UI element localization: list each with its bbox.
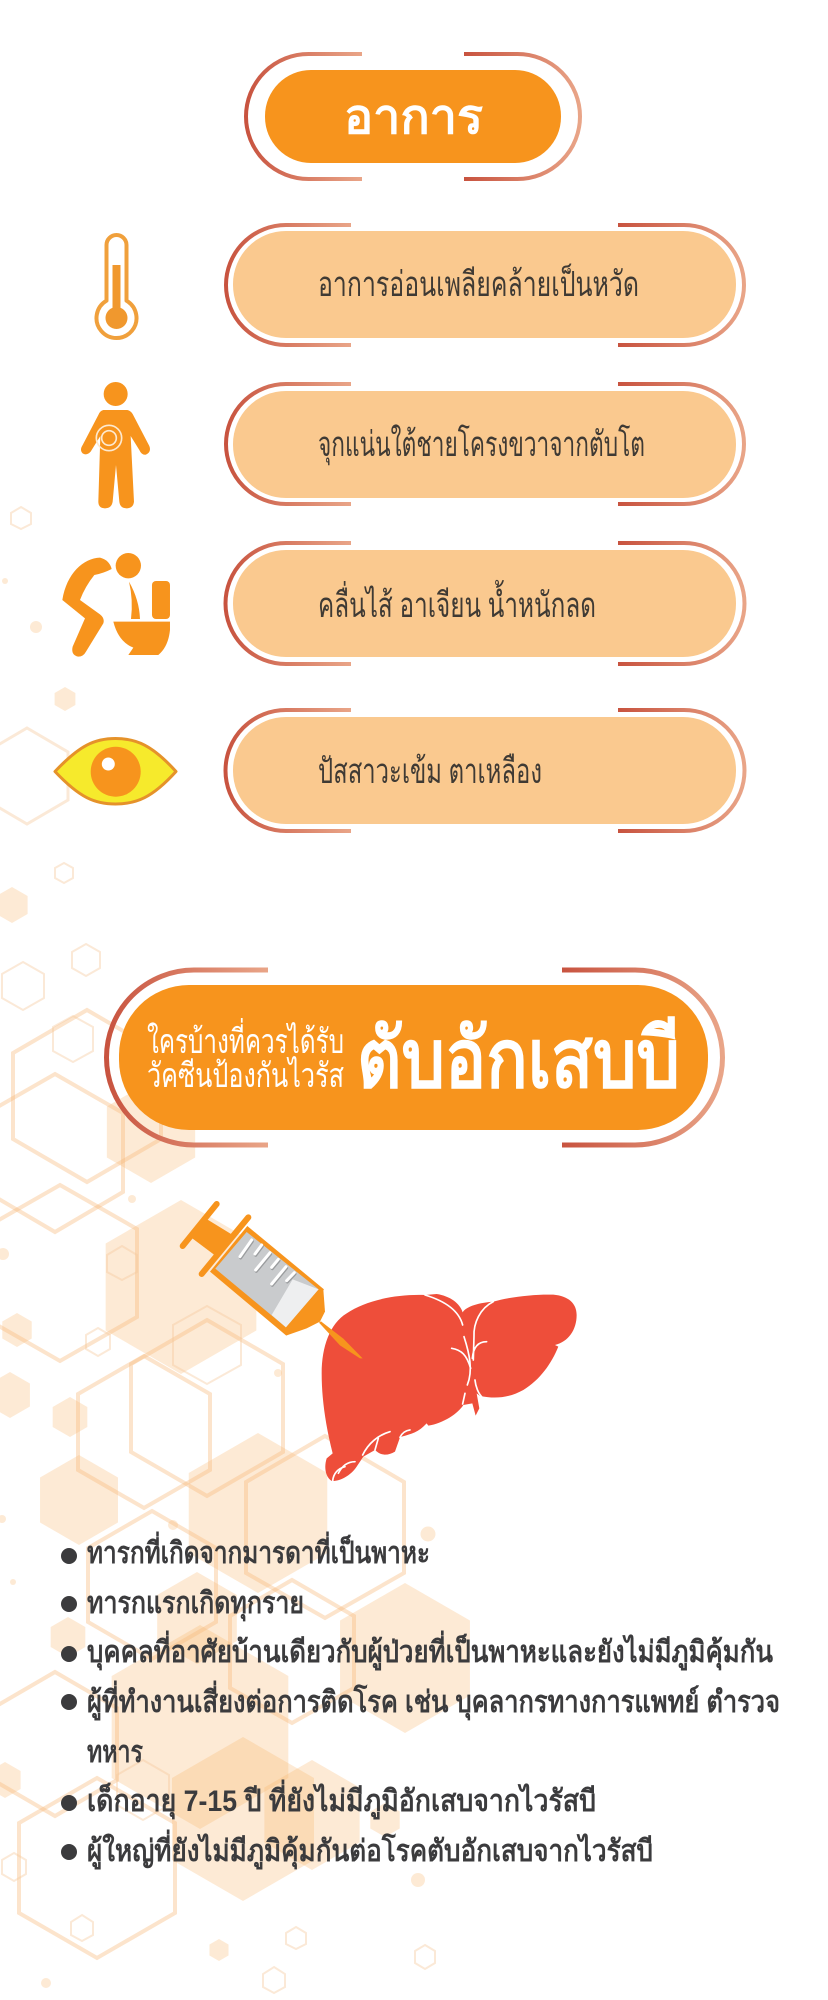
heading: who should get the vaccine: วัคซีนป้องกันไวรัส xyxy=(147,1056,344,1095)
heading: who should get the vaccine: ใครบ้างที่ควรได้รับ xyxy=(147,1018,344,1061)
heading: symptoms: อาการ xyxy=(344,91,483,144)
bullet list: at-risk groups: ทารกที่เกิดจากมารดาที่เป็นพาหะ xyxy=(87,1531,430,1570)
icon: thermometer xyxy=(97,235,136,338)
bullet list: at-risk groups: ทหาร xyxy=(87,1736,143,1769)
bullet list: at-risk groups: ผู้ใหญ่ที่ยังไม่มีภูมิคุ้มกันต่อโรคตับอักเสบจากไวรัสบี xyxy=(87,1829,653,1870)
card: weakness: อาการอ่อนเพลียคล้ายเป็นหวัด xyxy=(318,263,639,304)
card: dark urine, yellow eyes xyxy=(225,710,744,831)
card: tightness under ribs xyxy=(226,384,744,504)
heading: who should get the vaccine xyxy=(106,970,722,1145)
icon: yellow eye xyxy=(55,738,176,804)
bullet list: at-risk groups xyxy=(61,1531,780,1870)
heading: symptoms xyxy=(246,54,580,179)
bullet list: at-risk groups: ทารกแรกเกิดทุกราย xyxy=(87,1587,304,1622)
bullet list: at-risk groups: เด็กอายุ 7-15 ปี ที่ยังไม่มีภูมิอักเสบจากไวรัสบี xyxy=(87,1779,596,1820)
card: nausea: คลื่นไส้ อาเจียน น้ำหนักลด xyxy=(318,579,596,625)
illustration: syringe xyxy=(183,1204,363,1358)
illustration: liver xyxy=(322,1294,577,1481)
card: weakness xyxy=(226,225,744,345)
background hexagon pattern xyxy=(0,507,470,1993)
heading: who should get the vaccine: ตับอักเสบบี xyxy=(357,1014,680,1105)
card: dark urine, yellow eyes: ปัสสาวะเข้ม ตาเหลือง xyxy=(318,752,542,791)
icon: person with abdominal pain xyxy=(81,382,150,508)
icon: person vomiting into toilet xyxy=(62,553,170,657)
card: nausea xyxy=(225,543,744,664)
card: tightness under ribs: จุกแน่นใต้ชายโครงขวาจากตับโต xyxy=(318,424,645,465)
